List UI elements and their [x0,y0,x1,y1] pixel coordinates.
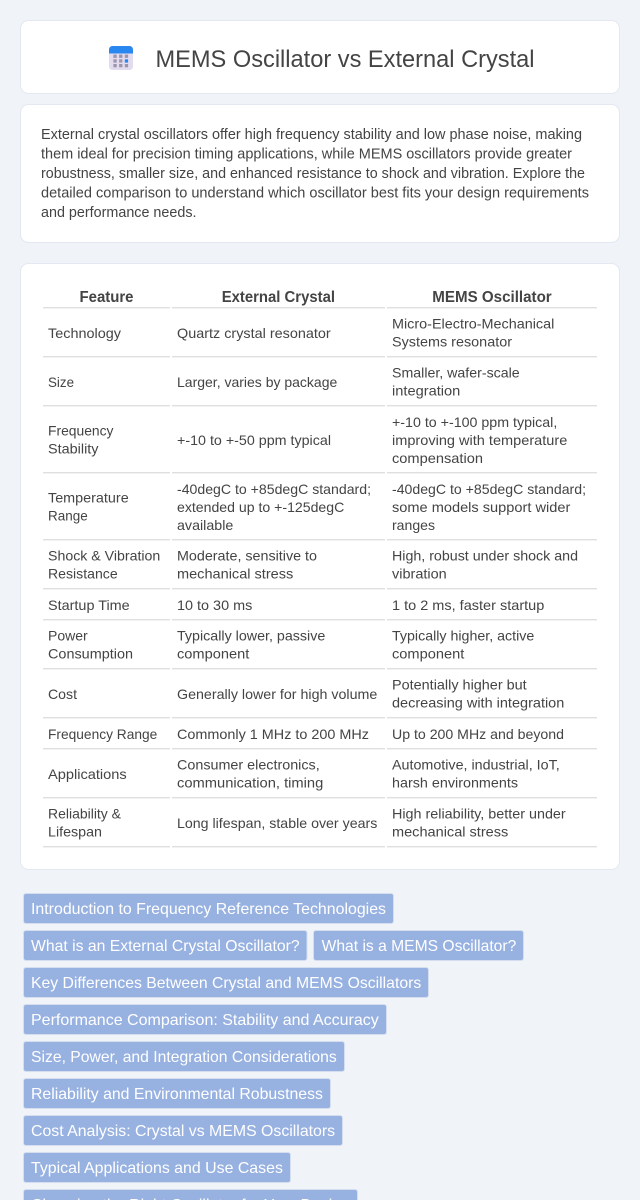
table row: technology: Technology [48,325,121,341]
text block: introduction paragraph [41,127,589,221]
table row: frequency range: Frequency Range [48,726,158,742]
table header row: Feature [80,289,134,306]
table row: temperature range: some models support wider [392,499,571,515]
table row: reliability and lifespan: Lifespan [48,824,102,840]
tag: MEMS oscillator: What is a MEMS Oscillator? [322,938,516,955]
tag: applications [24,1152,290,1182]
table row: frequency stability: Frequency [48,422,114,438]
text block: introduction paragraph: them ideal for precision timing applications, while MEMS oscillators provide greater [41,146,572,162]
table row: shock and vibration resistance [43,548,597,589]
table header row [43,289,597,308]
tag: choosing the right oscillator [24,1190,358,1200]
table header row: External Crystal [222,289,335,306]
table row: size: Smaller, wafer-scale [392,364,520,380]
table header row: MEMS Oscillator [432,289,552,306]
table row: reliability and lifespan: High reliability, better under [392,806,566,822]
tag: performance comparison: Performance Comparison: Stability and Accuracy [31,1012,379,1029]
text block: introduction paragraph: and performance needs. [41,205,196,221]
table row: cost: Potentially higher but [392,676,527,692]
table row: shock and vibration resistance: High, robust under shock and [392,548,578,564]
text block: introduction paragraph: External crystal oscillators offer high frequency stability and low phase noise, making [41,127,582,143]
table row: power consumption: component [392,646,464,662]
table row: applications: Automotive, industrial, IoT, [392,756,560,772]
table row: power consumption: Typically lower, passive [177,628,326,644]
tag: introduction [24,894,394,924]
text block: introduction paragraph: detailed comparison to understand which oscillator best fits your design requirements [41,186,589,202]
table row: power consumption: component [177,646,249,662]
tag: reliability [24,1078,330,1108]
table row: startup time: 10 to 30 ms [177,597,252,613]
table row: frequency stability: +-10 to +-50 ppm typical [177,432,331,448]
table row: shock and vibration resistance: Resistance [48,566,118,582]
tag: external crystal oscillator: What is an External Crystal Oscillator? [31,938,300,955]
table row: startup time: Startup Time [48,597,130,613]
table row: reliability and lifespan: Long lifespan, stable over years [177,815,377,831]
table row: frequency range: Commonly 1 MHz to 200 MHz [177,726,369,742]
tag: external crystal oscillator [24,930,307,960]
table row: temperature range: available [177,517,234,533]
table row: frequency stability: improving with temperature [392,432,568,448]
table row: temperature range: extended up to +-125degC [177,499,344,515]
tag: applications: Typical Applications and Use Cases [31,1160,283,1177]
table row: shock and vibration resistance: Moderate, sensitive to [177,548,317,564]
tag: MEMS oscillator [314,930,524,960]
table row: power consumption [43,628,597,669]
table row: temperature range: ranges [392,517,435,533]
table row: frequency stability [43,414,597,473]
table row: temperature range: -40degC to +85degC standard; [392,481,586,497]
table row: cost: decreasing with integration [392,694,564,710]
table row: power consumption: Consumption [48,646,133,662]
icon: calendar [109,46,133,70]
table row: temperature range: Range [48,508,88,524]
table row: frequency range: Up to 200 MHz and beyond [392,726,564,742]
table row: shock and vibration resistance: Shock & Vibration [48,548,160,564]
table row: cost: Generally lower for high volume [177,686,378,702]
table row: reliability and lifespan [43,806,597,847]
table row: shock and vibration resistance: vibration [392,566,447,582]
table row: technology: Quartz crystal resonator [177,325,331,341]
table row: size: integration [392,382,460,398]
table row: cost: Cost [48,686,77,702]
table row: applications: communication, timing [177,774,323,790]
tag: size, power, integration [24,1042,344,1072]
table row: applications: Consumer electronics, [177,756,320,772]
table row: technology: Micro-Electro-Mechanical [392,316,554,332]
tag: key differences: Key Differences Between Crystal and MEMS Oscillators [31,975,421,992]
tag: reliability: Reliability and Environmental Robustness [31,1086,323,1103]
table row: frequency stability: Stability [48,440,98,456]
table row: temperature range: -40degC to +85degC standard; [177,481,371,497]
table row: cost [43,676,597,718]
table row: technology [43,316,597,357]
panel: title card [20,20,620,94]
table row: reliability and lifespan: Reliability & [48,806,122,822]
table row: temperature range [43,481,597,540]
table row: startup time [43,597,597,620]
table row: temperature range: Temperature [48,490,129,506]
table row: size: Larger, varies by package [177,374,338,390]
table row: frequency range [43,726,597,749]
tag: cost analysis [24,1116,342,1146]
tag: key differences [24,968,428,998]
tag: performance comparison [24,1004,386,1034]
table row: reliability and lifespan: mechanical stress [392,824,508,840]
table row: power consumption: Typically higher, active [392,628,535,644]
table row: size: Size [48,374,74,390]
tag: introduction: Introduction to Frequency Reference Technologies [31,901,386,918]
tag list: article topics [24,894,524,1200]
panel: comparison table [20,264,620,870]
table row: shock and vibration resistance: mechanical stress [177,566,293,582]
tag: cost analysis: Cost Analysis: Crystal vs MEMS Oscillators [31,1123,335,1140]
table row: applications: harsh environments [392,774,518,790]
table row: frequency stability: compensation [392,450,483,466]
tag: size, power, integration: Size, Power, and Integration Considerations [31,1049,337,1066]
table row: size [43,364,597,406]
table row: power consumption: Power [48,628,88,644]
text block: introduction paragraph: robustness, smaller size, and enhanced resistance to shock and vibration. Explore the [41,166,585,182]
table row: startup time: 1 to 2 ms, faster startup [392,597,545,613]
table row: applications: Applications [48,766,127,782]
panel: introduction [20,104,620,242]
title: MEMS Oscillator vs External Crystal [156,46,534,73]
table row: technology: Systems resonator [392,334,512,350]
table row: frequency stability: +-10 to +-100 ppm typical, [392,414,557,430]
table row: applications [43,756,597,798]
